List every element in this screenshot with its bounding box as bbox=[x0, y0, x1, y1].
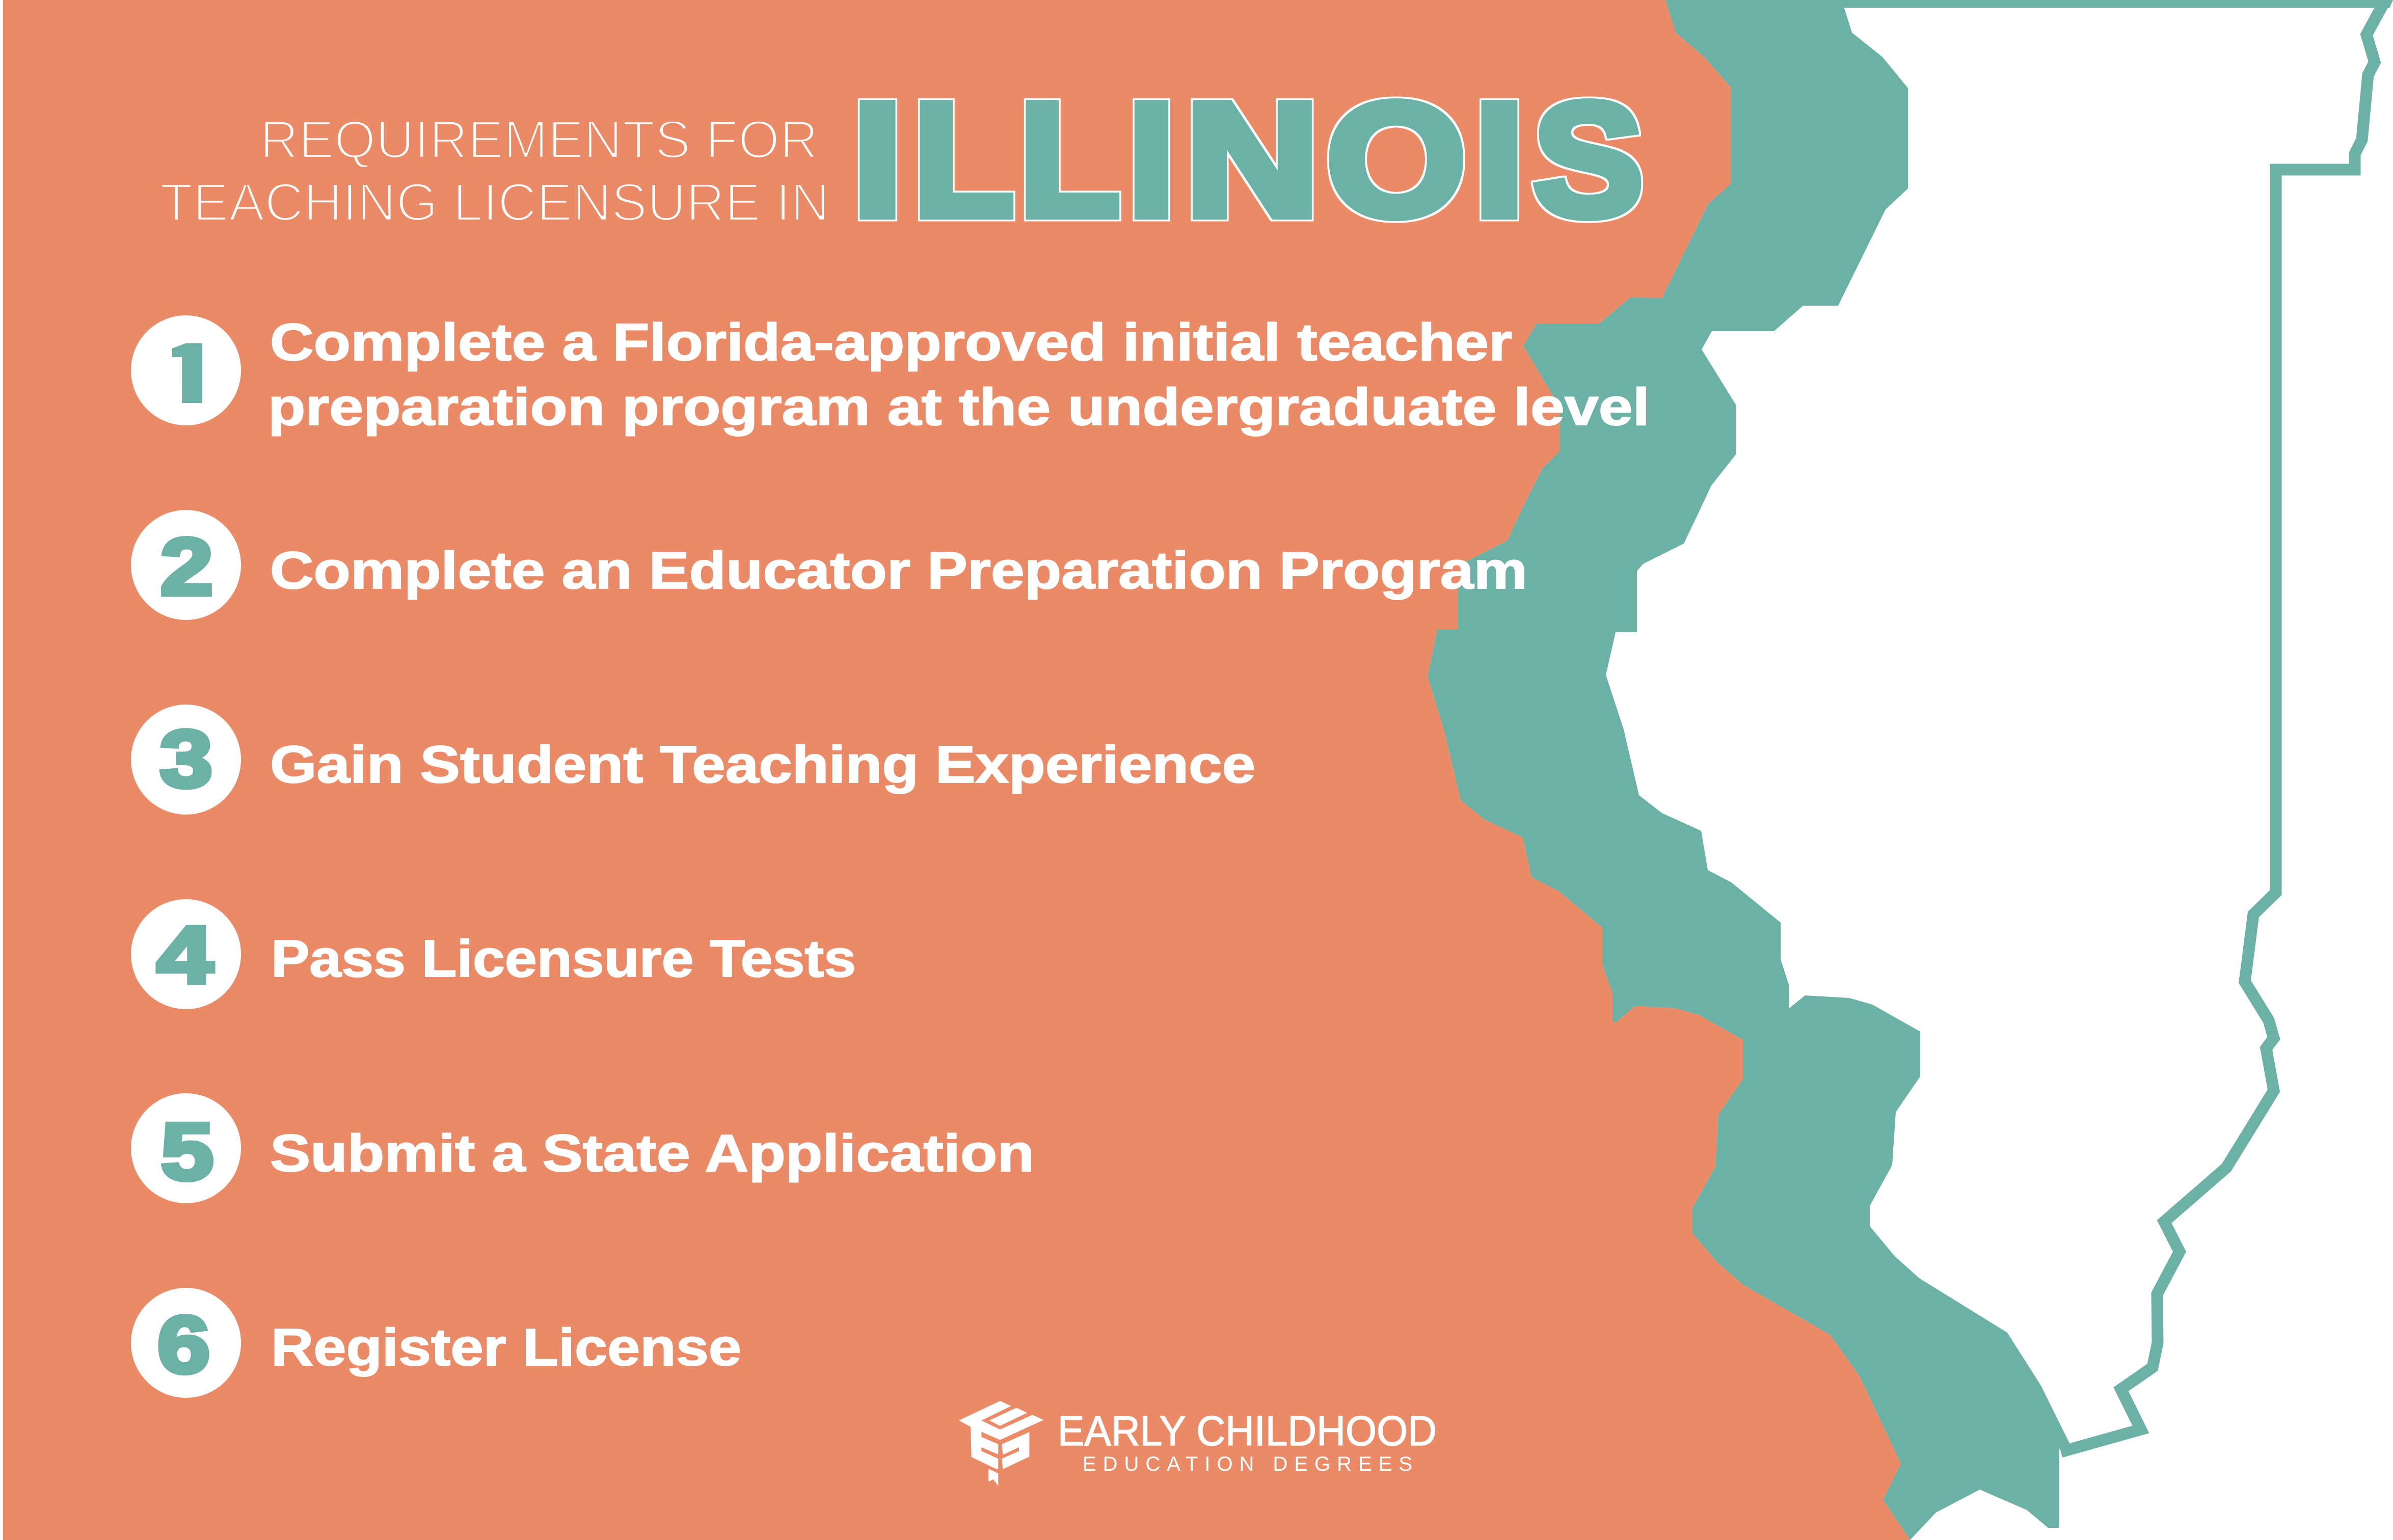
step 2 badge: 2 bbox=[160, 522, 213, 612]
state name ILLINOIS: L bbox=[913, 70, 1014, 249]
subtitle line 2: TEACHING LICENSURE IN bbox=[160, 173, 829, 232]
step 4 badge bbox=[131, 899, 241, 1009]
step 1 badge: 1 bbox=[154, 329, 230, 418]
logo: Early Childhood Education Degrees bbox=[959, 1401, 1437, 1486]
step 2 text: Complete an Educator Preparation Program bbox=[270, 541, 1527, 600]
state name ILLINOIS: L bbox=[1019, 70, 1120, 249]
step 3 text: Gain Student Teaching Experience bbox=[270, 735, 1255, 794]
step 6 badge: 6 bbox=[157, 1300, 210, 1390]
step 2 badge bbox=[131, 510, 241, 620]
map: Illinois state outline bbox=[1834, 0, 2393, 1452]
step 3 badge bbox=[131, 705, 241, 815]
step 5 badge: 5 bbox=[161, 1107, 213, 1197]
step 4 text: Pass Licensure Tests bbox=[271, 929, 856, 988]
step 5 badge bbox=[131, 1093, 241, 1203]
step 3 bbox=[131, 705, 1255, 815]
state name ILLINOIS: I bbox=[1474, 70, 1524, 249]
step 2 bbox=[131, 510, 1527, 620]
subtitle line 1: REQUIREMENTS FOR bbox=[260, 110, 818, 170]
logo tagline: EDUCATION DEGREES bbox=[1083, 1453, 1412, 1475]
step 1 badge bbox=[131, 315, 241, 425]
state name ILLINOIS: I bbox=[853, 70, 902, 249]
state name ILLINOIS: O bbox=[1327, 70, 1466, 249]
step 4 bbox=[131, 899, 856, 1009]
step 5 bbox=[131, 1093, 1034, 1203]
step 3 badge: 3 bbox=[160, 714, 212, 804]
panel: coral background bbox=[3, 0, 1910, 1540]
title bbox=[160, 70, 1643, 249]
step 1 bbox=[131, 313, 1650, 436]
step 4 badge: 4 bbox=[157, 910, 213, 1000]
icon: graduation cap book bbox=[959, 1401, 1043, 1486]
map: Illinois state shadow bbox=[1428, 0, 2069, 1540]
state name ILLINOIS: I bbox=[1128, 70, 1175, 249]
logo wordmark: EARLY CHILDHOOD bbox=[1058, 1407, 1437, 1454]
state name ILLINOIS: N bbox=[1186, 70, 1319, 249]
state name ILLINOIS: S bbox=[1534, 70, 1643, 249]
step 1 text: preparation program at the undergraduate level bbox=[268, 377, 1650, 436]
step 6 badge bbox=[131, 1288, 241, 1398]
step 1 text: Complete a Florida-approved initial teacher bbox=[270, 313, 1512, 371]
step 6 bbox=[131, 1288, 741, 1398]
step 5 text: Submit a State Application bbox=[270, 1124, 1034, 1182]
step 6 text: Register License bbox=[271, 1318, 741, 1376]
